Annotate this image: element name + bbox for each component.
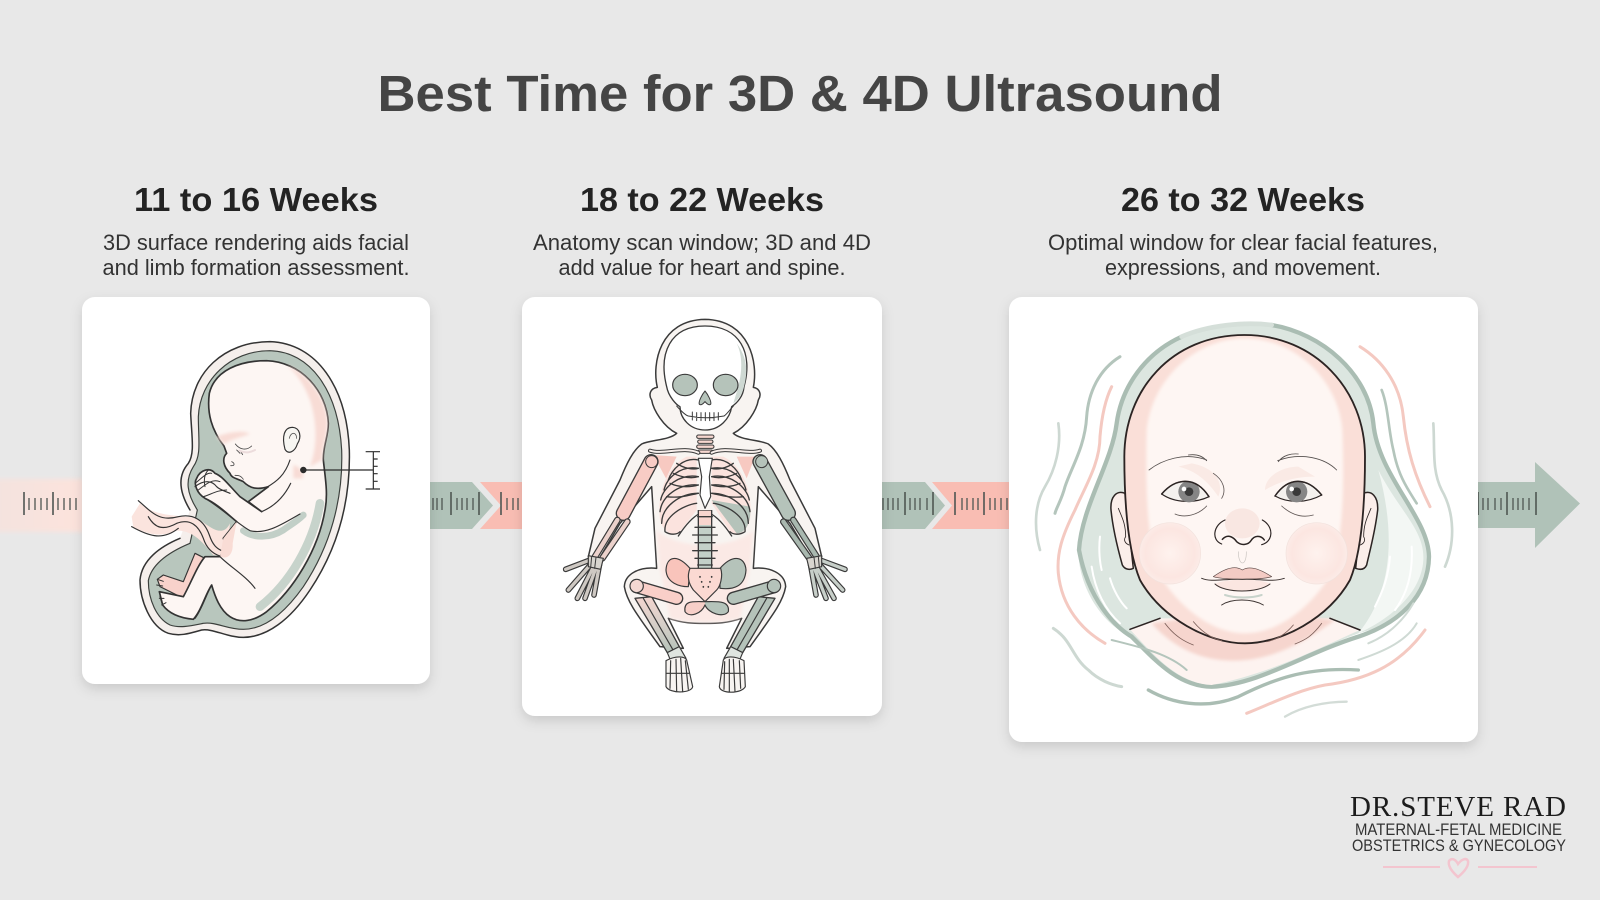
lower legs: [635, 597, 775, 661]
skull: [664, 326, 747, 430]
ears: [1111, 492, 1378, 569]
torso pink shading: [657, 530, 753, 622]
band: green chevron two: [880, 482, 945, 529]
clavicles: [650, 450, 760, 453]
under-eye lines: [1175, 473, 1313, 516]
eyebrows: [1149, 454, 1337, 470]
ear inner: [289, 433, 297, 438]
nose cavity: [699, 391, 711, 405]
logo subtitle: [1352, 821, 1566, 855]
upper arms: [623, 456, 788, 513]
sternum: [698, 458, 712, 508]
fetus body: [159, 361, 328, 621]
logo subtitle: OBSTETRICS & GYNECOLOGY: [1352, 837, 1566, 855]
logo: Dr. Steve Rad: [1350, 791, 1566, 877]
amniotic sac outer: [140, 342, 349, 637]
hands: [566, 556, 845, 598]
panel: fetus card: [82, 297, 430, 684]
swaddle right highlight: [1358, 470, 1423, 633]
panel: baby face card: [1009, 297, 1478, 742]
panel: skeleton card: [522, 297, 882, 716]
logo subtitle: MATERNAL-FETAL MEDICINE: [1355, 821, 1562, 839]
nose: [1215, 508, 1271, 563]
feet: [666, 657, 745, 692]
ribcage: [659, 457, 751, 536]
description: 11 to 16 weeks: and limb formation assessment.: [102, 255, 410, 280]
chin creases: [1165, 622, 1322, 645]
eye: [235, 444, 252, 455]
description: 18 to 22 weeks: Anatomy scan window; 3D and 4D: [533, 230, 871, 255]
toes: [157, 579, 166, 605]
left eye: [1162, 481, 1209, 502]
band: pink chevron two: [932, 482, 1012, 529]
neck and chest: [1130, 618, 1360, 685]
logo: Dr. Steve Rad: DR.STEVE RAD: [1350, 791, 1566, 823]
description: 26 to 32 weeks: expressions, and movement.: [1105, 255, 1381, 280]
ear: [284, 427, 300, 452]
green swaddle: [1078, 323, 1428, 687]
head: [1124, 335, 1365, 643]
title: Best Time for 3D & 4D Ultrasound: [378, 65, 1222, 122]
neck crease: [248, 460, 290, 502]
back shadow: [260, 503, 320, 607]
measurement ruler: [301, 452, 380, 489]
right eye: [1275, 481, 1322, 502]
cheeks: [1139, 523, 1201, 584]
band: pink chevron one: [480, 482, 524, 529]
column heading: 26 to 32 Weeks: 26 to 32 Weeks: [1121, 181, 1365, 218]
swaddle top pale band: [1182, 324, 1272, 337]
skull shade: [733, 343, 746, 403]
fluid waves: [1036, 347, 1452, 717]
description: 11 to 16 weeks: [102, 230, 410, 280]
amniotic fluid: [148, 351, 342, 629]
head outline: [1124, 335, 1365, 643]
mouth: [1202, 568, 1284, 605]
description: 11 to 16 weeks: 3D surface rendering aids facial: [103, 230, 409, 255]
pink shin and foot: [157, 553, 205, 597]
illustration: baby face: [1036, 323, 1452, 717]
illustration: early fetus in sac: [132, 342, 380, 637]
band: final green arrow: [1476, 462, 1580, 548]
description: 26 to 32 weeks: Optimal window for clear facial features,: [1048, 230, 1438, 255]
chest pink shading: [220, 522, 237, 558]
logo heart and lines: [1383, 859, 1537, 877]
illustration: fetal skeleton: [566, 319, 845, 692]
scapulae: [653, 455, 677, 478]
face highlight: [1146, 338, 1343, 633]
teeth: [677, 406, 733, 421]
band: left pale pink segment: [0, 479, 84, 532]
pelvis: [666, 558, 746, 615]
swaddle outline band: [1079, 325, 1429, 687]
description: 18 to 22 weeks: [533, 230, 871, 280]
timeline ruler arrow band: [0, 462, 1580, 548]
column heading: 18 to 22 Weeks: 18 to 22 Weeks: [580, 181, 824, 218]
nose and mouth: [231, 462, 243, 479]
column heading: 11 to 16 Weeks: [102, 181, 410, 280]
femurs: [630, 579, 781, 598]
description: 18 to 22 weeks: add value for heart and spine.: [558, 255, 846, 280]
band: green chevron one: [428, 482, 493, 529]
spine: [693, 510, 717, 570]
body outline: [588, 319, 822, 648]
forearms: [595, 520, 817, 558]
fist fingers: [195, 470, 227, 497]
neck shadow: [1152, 610, 1335, 661]
eye sockets: [673, 374, 697, 396]
under arm shadow: [243, 515, 303, 536]
head pink shading: [217, 365, 327, 478]
column heading: 26 to 32 Weeks: [1048, 181, 1438, 280]
umbilical cord: [132, 503, 230, 557]
ruler ticks: [24, 492, 1536, 515]
neck vertebrae: [698, 437, 712, 452]
column heading: 11 to 16 Weeks: 11 to 16 Weeks: [134, 181, 378, 218]
body lines: [1130, 618, 1360, 630]
column heading: 18 to 22 Weeks: [533, 181, 871, 280]
leg lines: [160, 557, 255, 618]
eye shading: [1178, 463, 1315, 497]
arm lines: [195, 482, 300, 532]
description: 26 to 32 weeks: [1048, 230, 1438, 280]
